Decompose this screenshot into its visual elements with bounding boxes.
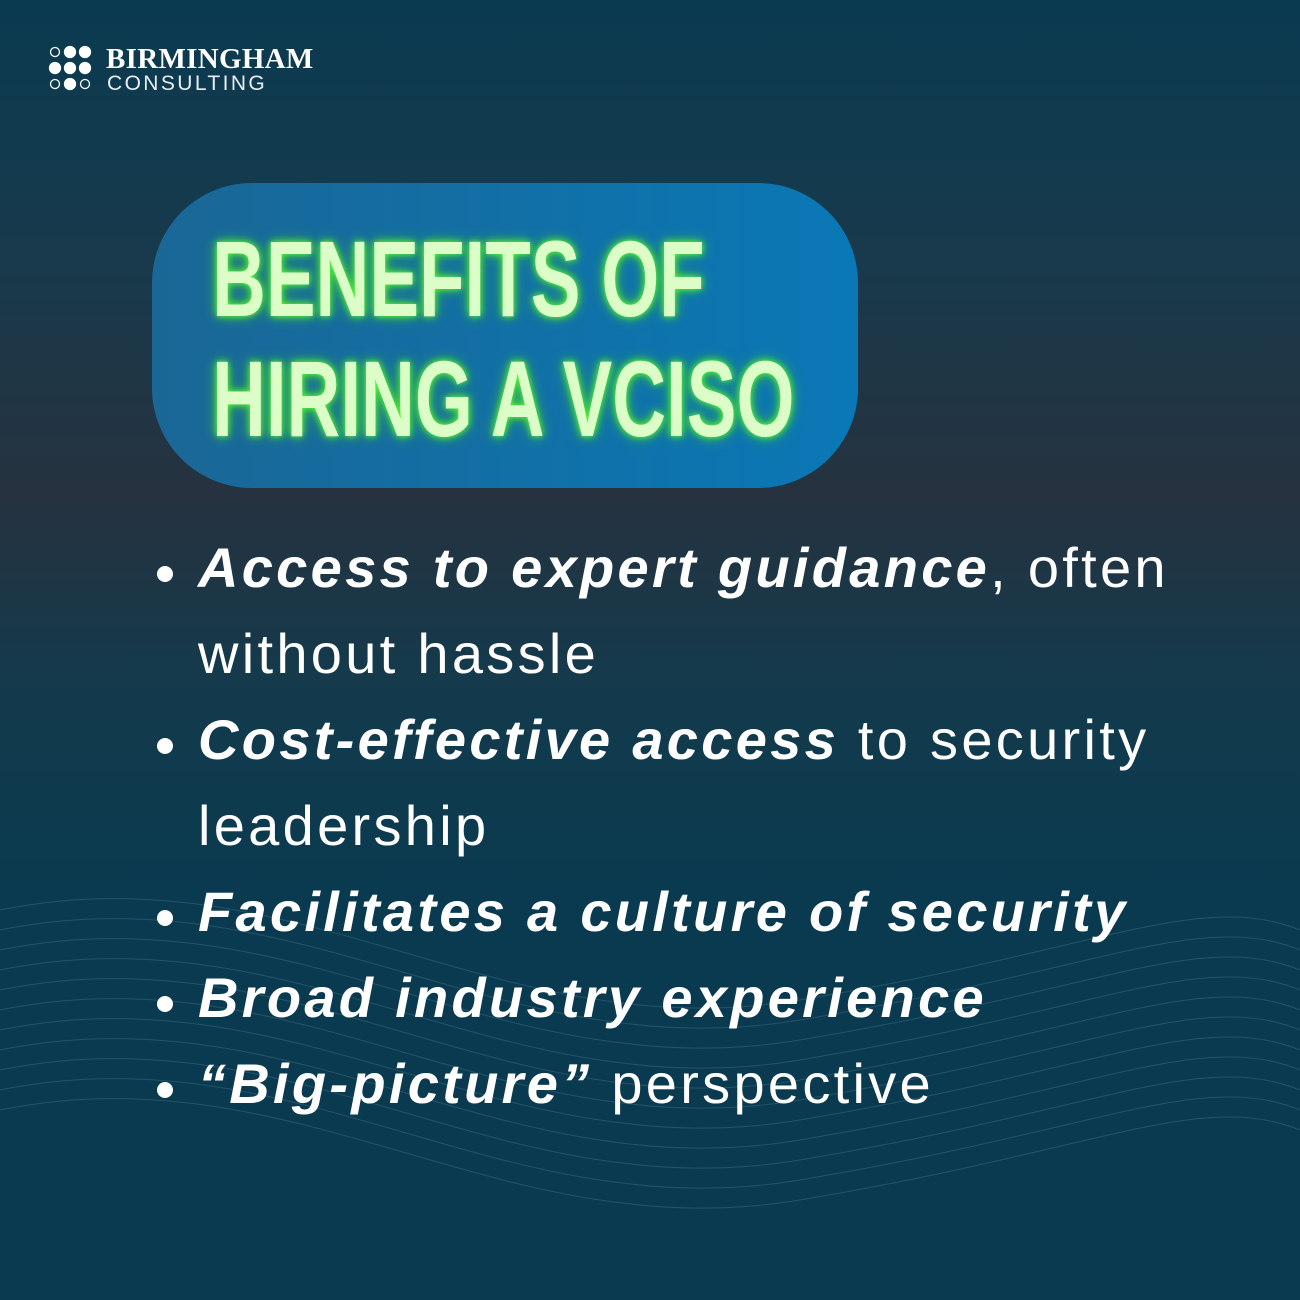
bullet list: without hassle <box>198 622 599 685</box>
bullet list: Facilitates a culture of security <box>198 880 1129 943</box>
title: BENEFITS OF <box>212 218 705 339</box>
bullet list: Cost-effective access to security <box>198 708 1149 771</box>
title: HIRING A VCISO <box>212 338 794 459</box>
bullet list: “Big-picture” perspective <box>198 1052 934 1115</box>
bullet list <box>157 536 1169 1115</box>
logo: CONSULTING <box>107 72 267 95</box>
logo text: BIRMINGHAM <box>106 43 314 75</box>
title <box>208 218 801 459</box>
bullet list: Broad industry experience <box>198 966 987 1029</box>
bullet list: Access to expert guidance, often <box>198 536 1169 599</box>
icon: dot grid <box>48 46 92 90</box>
title pill <box>152 183 858 488</box>
bullet list: leadership <box>198 794 489 857</box>
logo <box>48 43 314 95</box>
